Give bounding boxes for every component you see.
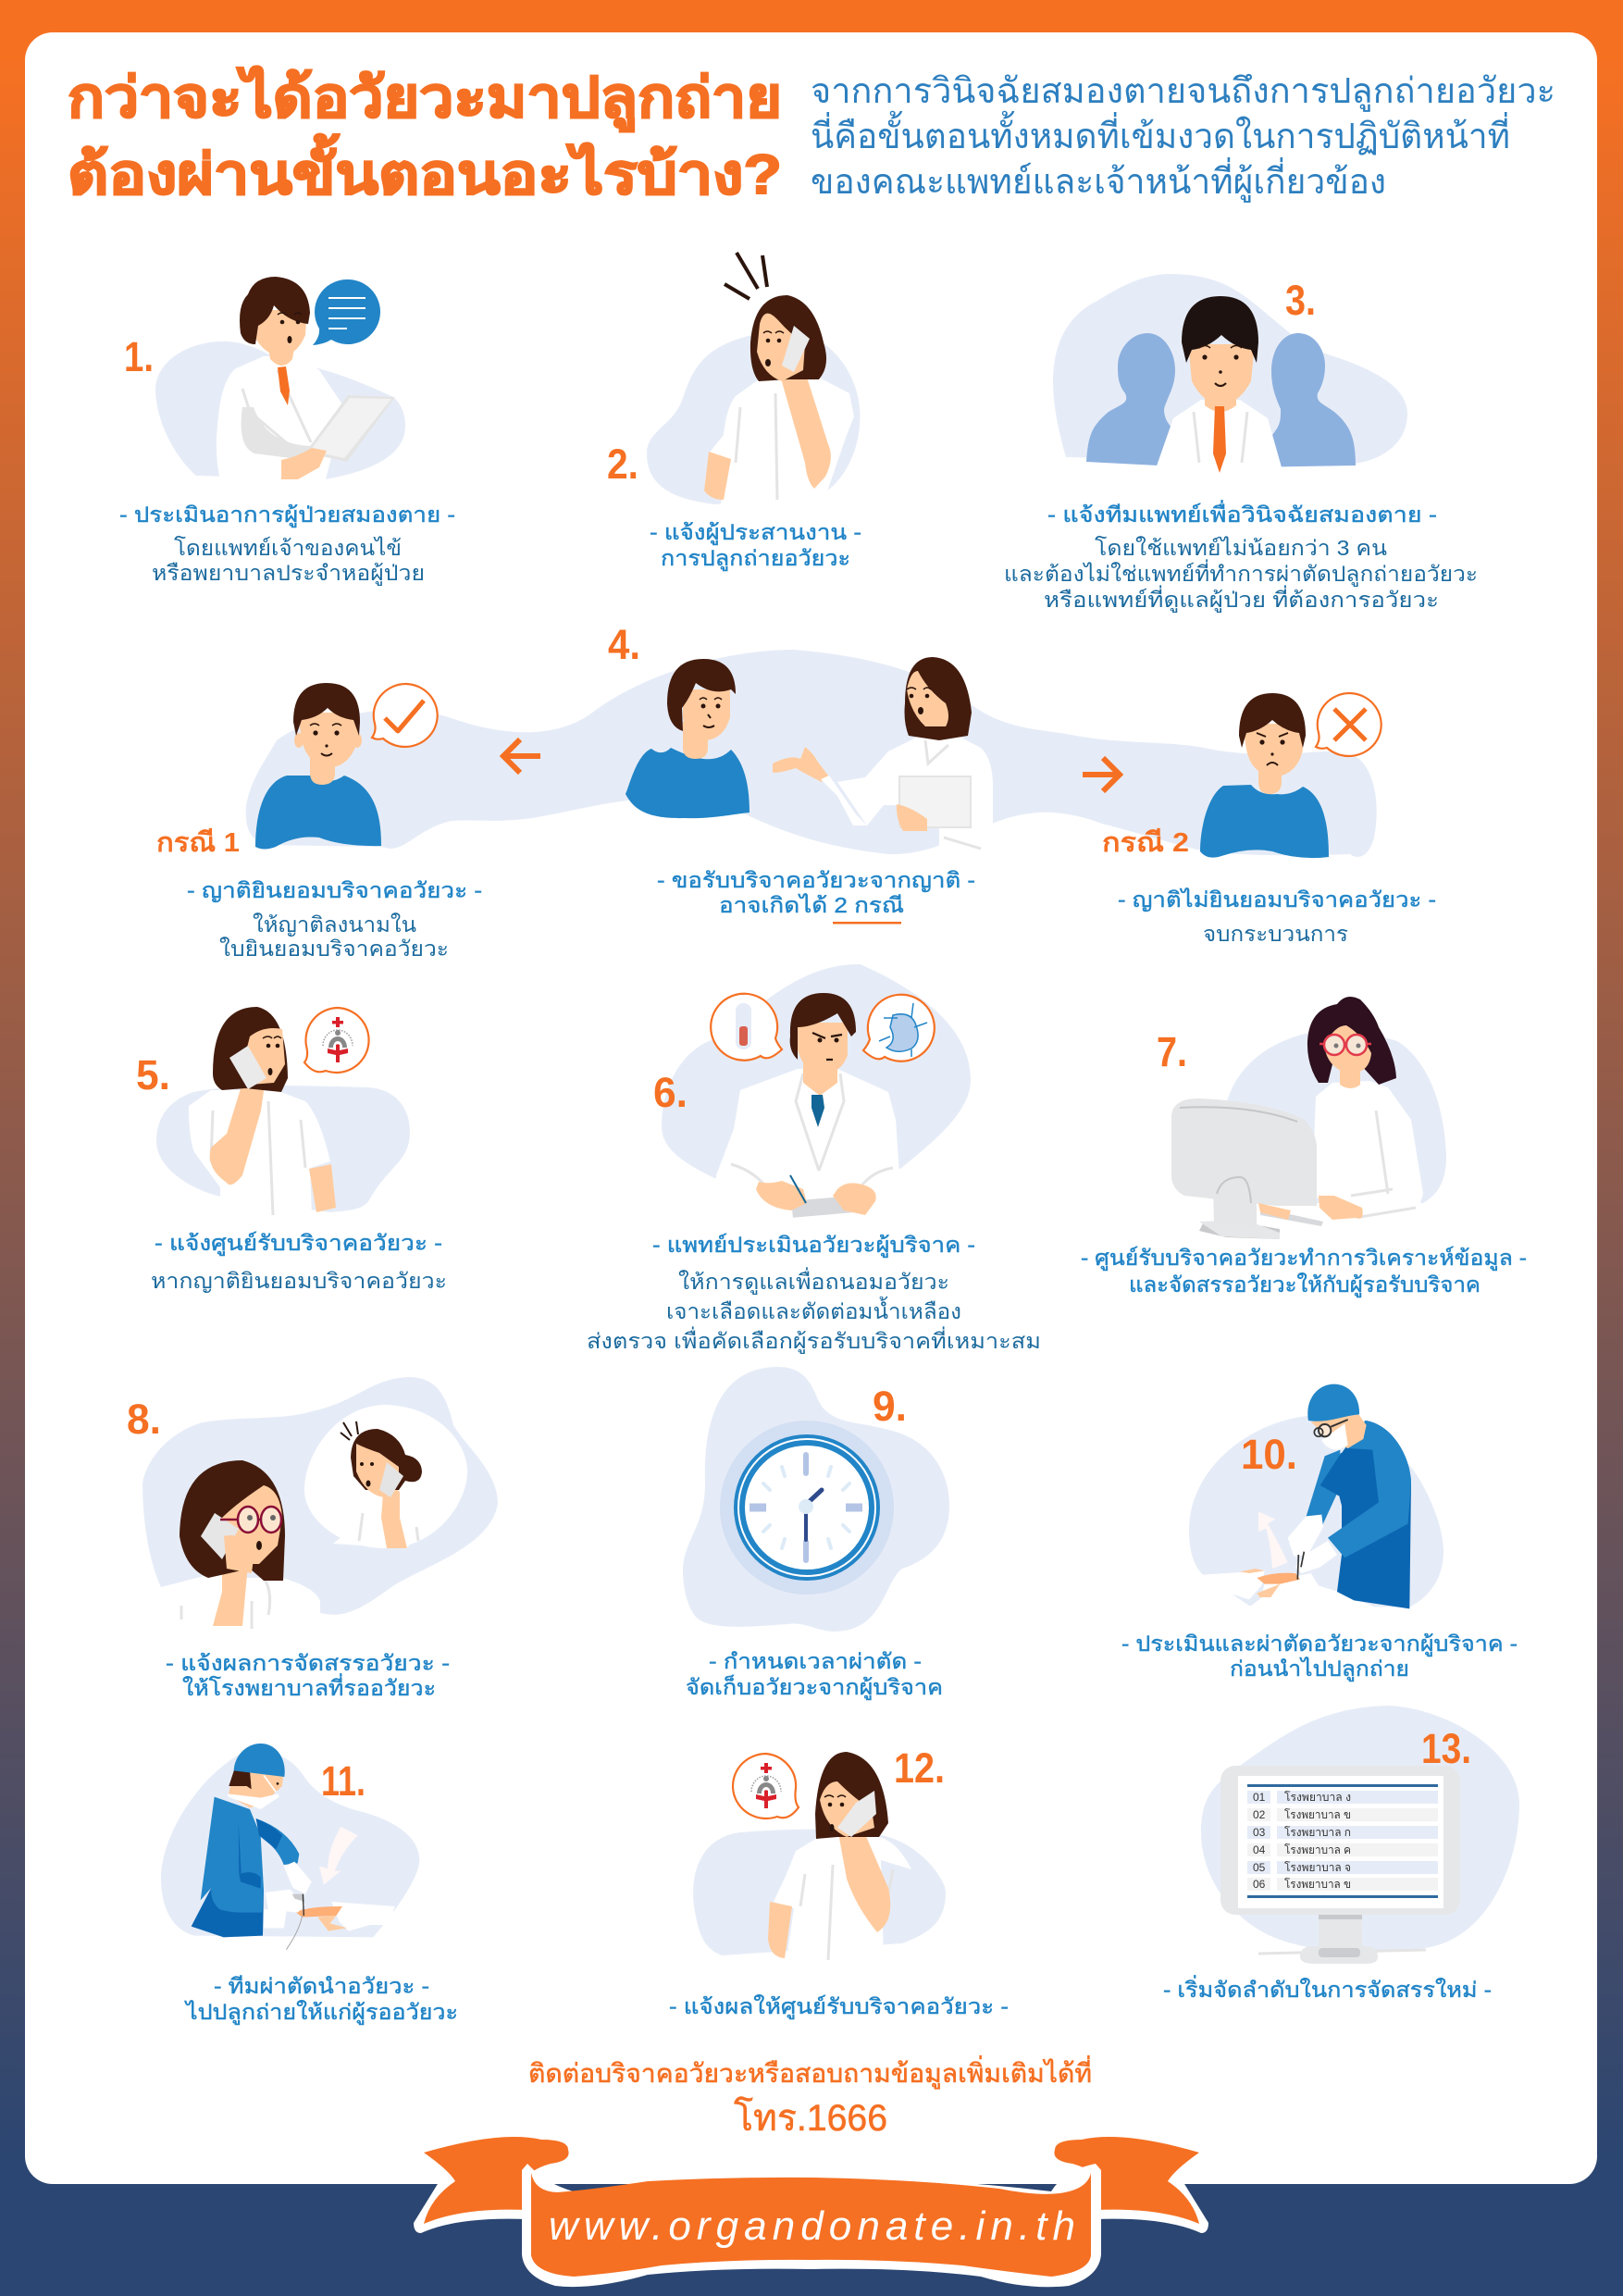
blob 2 bbox=[647, 329, 860, 504]
caption 2: การปลูกถ่ายอวัยวะ bbox=[661, 546, 850, 571]
caption 7: - ศูนย์รับบริจาคอวัยวะทำการวิเคราะห์ข้อมูล - bbox=[1081, 1246, 1527, 1271]
panel: step 12 bbox=[669, 1744, 1009, 2019]
clock bbox=[720, 1421, 894, 1595]
list row 02: 02 bbox=[1253, 1808, 1266, 1821]
caption 3: หรือแพทย์ที่ดูแลผู้ป่วย ที่ต้องการอวัยวะ bbox=[1044, 585, 1439, 613]
step number 4: 4. bbox=[608, 621, 640, 668]
ribbon banner bbox=[414, 2137, 1208, 2287]
caption 6: ให้การดูแลเพื่อถนอมอวัยวะ bbox=[678, 1267, 949, 1295]
organ bubble bbox=[863, 995, 935, 1061]
caption 1: - ประเมินอาการผู้ป่วยสมองตาย - bbox=[119, 503, 455, 527]
caption 6: ส่งตรวจ เพื่อคัดเลือกผู้รอรับบริจาคที่เหมาะสม bbox=[587, 1326, 1041, 1354]
arrow right bbox=[1083, 758, 1120, 791]
list row 02: โรงพยาบาล ข bbox=[1284, 1808, 1351, 1821]
woman on phone 12 bbox=[768, 1752, 911, 1962]
panel: step 10 bbox=[1121, 1384, 1518, 1682]
list row 03 bbox=[1247, 1826, 1438, 1839]
caption 3: - แจ้งทีมแพทย์เพื่อวินิจฉัยสมองตาย - bbox=[1047, 500, 1437, 527]
caption 9: - กำหนดเวลาผ่าตัด - bbox=[709, 1649, 922, 1673]
caption 6: เจาะเลือดและตัดต่อมน้ำเหลือง bbox=[666, 1297, 961, 1323]
white inner circle bbox=[304, 1405, 467, 1548]
list row 01: 01 bbox=[1253, 1791, 1266, 1804]
caption case 1: ใบยินยอมบริจาคอวัยวะ bbox=[219, 937, 449, 961]
step number 3: 3. bbox=[1285, 277, 1316, 324]
caption 10: - ประเมินและผ่าตัดอวัยวะจากผู้บริจาค - bbox=[1121, 1632, 1518, 1657]
panel: step 2 bbox=[607, 253, 861, 571]
computer monitor bbox=[1171, 1098, 1363, 1239]
caption case 1: ให้ญาติลงนามใน bbox=[253, 912, 416, 937]
panel: step 3 bbox=[1004, 274, 1478, 613]
blob 13 bbox=[1201, 1706, 1519, 1953]
caption 1: หรือพยาบาลประจำหอผู้ป่วย bbox=[152, 561, 425, 586]
caption 7 bbox=[1081, 1246, 1527, 1297]
woman centre bbox=[773, 657, 993, 849]
list row 02 bbox=[1247, 1808, 1438, 1821]
silhouette right bbox=[1249, 333, 1356, 467]
list row 01: โรงพยาบาล ง bbox=[1284, 1791, 1351, 1804]
list row 05: โรงพยาบาล จ bbox=[1284, 1861, 1351, 1874]
motion lines bbox=[725, 253, 767, 299]
step number 12: 12. bbox=[894, 1744, 945, 1792]
caption 7: และจัดสรรอวัยวะให้กับผู้รอรับบริจาค bbox=[1129, 1272, 1481, 1297]
list row 04: 04 bbox=[1253, 1843, 1266, 1856]
case 1 label: กรณี 1 bbox=[156, 828, 240, 858]
list row 06: 06 bbox=[1253, 1878, 1266, 1891]
caption case 2: - ญาติไม่ยินยอมบริจาคอวัยวะ - bbox=[1118, 887, 1436, 912]
case 2 label: กรณี 2 bbox=[1102, 828, 1189, 858]
caption 13: - เริ่มจัดลำดับในการจัดสรรใหม่ - bbox=[1163, 1975, 1492, 2002]
caption 11: - ทีมผ่าตัดนำอวัยวะ - bbox=[214, 1974, 429, 1998]
blob 7 bbox=[1227, 1032, 1446, 1203]
wave blob 4 bbox=[246, 650, 1377, 857]
blob 6 bbox=[662, 964, 971, 1178]
test tube bubble bbox=[711, 994, 782, 1061]
subtitle: นี่คือขั้นตอนทั้งหมดที่เข้มงวดในการปฏิบัติหน้าที่ bbox=[811, 110, 1510, 156]
blob 9 bbox=[683, 1367, 949, 1632]
step number 9: 9. bbox=[873, 1383, 907, 1430]
panel: step 11 bbox=[161, 1744, 458, 2025]
caption 6 bbox=[587, 1233, 1041, 1354]
logo bubble 12 bbox=[733, 1754, 799, 1818]
ribbon white edge bbox=[522, 2164, 1101, 2287]
woman on phone 5 bbox=[189, 1007, 336, 1217]
panel: step 6 bbox=[587, 964, 1041, 1354]
arrow left bbox=[503, 739, 540, 773]
left tail bbox=[424, 2137, 569, 2224]
panel: step 8 bbox=[127, 1377, 498, 1700]
left tail outline bbox=[414, 2179, 527, 2233]
list row 06 bbox=[1247, 1878, 1438, 1891]
caption centre: อาจเกิดได้ 2 กรณี bbox=[719, 893, 904, 917]
silhouette left bbox=[1086, 333, 1194, 467]
caption 10 bbox=[1121, 1632, 1518, 1682]
list row 04 bbox=[1247, 1843, 1438, 1856]
caption 3 bbox=[1004, 500, 1478, 613]
panel: step 5 bbox=[136, 1007, 447, 1293]
step number 13: 13. bbox=[1421, 1725, 1471, 1772]
caption 5: หากญาติยินยอมบริจาคอวัยวะ bbox=[151, 1269, 447, 1293]
subtitle: จากการวินิจฉัยสมองตายจนถึงการปลูกถ่ายอวัยวะ bbox=[811, 72, 1555, 112]
contact text: โทร.1666 bbox=[734, 2097, 887, 2139]
caption 6: - แพทย์ประเมินอวัยวะผู้บริจาค - bbox=[652, 1233, 975, 1258]
title bbox=[68, 65, 782, 205]
blob 12 bbox=[693, 1830, 946, 1955]
caption 2: - แจ้งผู้ประสานงาน - bbox=[650, 520, 861, 545]
panel: step 13 bbox=[1163, 1706, 1519, 2002]
list row 04: โรงพยาบาล ค bbox=[1284, 1843, 1351, 1856]
panel: step 1 bbox=[119, 277, 455, 586]
step number 11: 11. bbox=[321, 1757, 365, 1805]
list row 05 bbox=[1247, 1861, 1438, 1874]
blob 5 bbox=[156, 1086, 410, 1212]
illustration 10 bbox=[1189, 1384, 1443, 1608]
caption centre bbox=[657, 868, 975, 924]
large woman with glasses bbox=[161, 1460, 320, 1629]
caption 8: - แจ้งผลการจัดสรรอวัยวะ - bbox=[166, 1651, 450, 1675]
caption 12: - แจ้งผลให้ศูนย์รับบริจาคอวัยวะ - bbox=[669, 1994, 1009, 2019]
caption case 1: - ญาติยินยอมบริจาคอวัยวะ - bbox=[187, 878, 482, 902]
caption 5: - แจ้งศูนย์รับบริจาคอวัยวะ - bbox=[155, 1231, 442, 1256]
caption 8 bbox=[166, 1651, 450, 1700]
small woman on phone bbox=[333, 1429, 422, 1548]
caption 11 bbox=[184, 1974, 458, 2025]
list row 01 bbox=[1247, 1791, 1438, 1804]
right tail bbox=[1054, 2137, 1199, 2224]
caption centre: - ขอรับบริจาคอวัยวะจากญาติ - bbox=[657, 868, 975, 892]
title: กว่าจะได้อวัยวะมาปลูกถ่าย bbox=[68, 65, 782, 132]
step number 8: 8. bbox=[127, 1396, 161, 1443]
person case 2 bbox=[1200, 693, 1329, 858]
subtitle: ของคณะแพทย์และเจ้าหน้าที่ผู้เกี่ยวข้อง bbox=[811, 157, 1386, 203]
caption 9 bbox=[686, 1649, 943, 1700]
caption case 2: จบกระบวนการ bbox=[1203, 922, 1348, 946]
panel: step 7 bbox=[1081, 997, 1527, 1297]
doctor with tablet bbox=[217, 277, 395, 479]
blob 8 bbox=[142, 1377, 498, 1615]
title: ต้องผ่านขั้นตอนอะไรบ้าง? bbox=[68, 133, 782, 205]
ribbon body bbox=[531, 2173, 1091, 2277]
blob 3 bbox=[1053, 274, 1407, 464]
step number 2: 2. bbox=[607, 441, 638, 488]
speech bubble blue bbox=[313, 279, 380, 345]
list row 06: โรงพยาบาล ข bbox=[1284, 1878, 1351, 1891]
woman at computer bbox=[1307, 997, 1423, 1222]
list row 05: 05 bbox=[1253, 1861, 1266, 1874]
contact text bbox=[528, 2055, 1092, 2139]
caption case 2 bbox=[1118, 887, 1436, 946]
step number 5: 5. bbox=[136, 1051, 170, 1098]
check bubble bbox=[372, 684, 438, 747]
caption 1: โดยแพทย์เจ้าของคนไข้ bbox=[174, 536, 402, 560]
logo bubble bbox=[304, 1008, 369, 1073]
monitor with hospital list bbox=[1220, 1766, 1460, 1964]
caption 1 bbox=[119, 503, 455, 586]
doctor with notes bbox=[716, 993, 899, 1218]
step number 1: 1. bbox=[124, 333, 154, 380]
list row 03: 03 bbox=[1253, 1826, 1266, 1839]
caption 10: ก่อนนำไปปลูกถ่าย bbox=[1230, 1657, 1409, 1682]
list row 03: โรงพยาบาล ก bbox=[1284, 1826, 1351, 1839]
panel: step 4 bbox=[156, 621, 1436, 961]
person centre bbox=[626, 659, 750, 818]
right tail outline bbox=[1095, 2179, 1208, 2233]
illustration 11 bbox=[161, 1744, 419, 1950]
bottom navy band bbox=[0, 2182, 1623, 2296]
blob 1 bbox=[155, 341, 405, 479]
motion lines small bbox=[341, 1421, 358, 1440]
woman on phone bbox=[704, 295, 854, 507]
step number 7: 7. bbox=[1157, 1028, 1187, 1075]
step number 10: 10. bbox=[1241, 1431, 1297, 1478]
panel: step 9 bbox=[683, 1367, 949, 1700]
caption 3: และต้องไม่ใช่แพทย์ที่ทำการผ่าตัดปลูกถ่ายอวัยวะ bbox=[1004, 559, 1478, 587]
person case 1 bbox=[255, 683, 381, 850]
step number 6: 6. bbox=[653, 1069, 688, 1116]
caption case 1 bbox=[187, 878, 482, 961]
caption 11: ไปปลูกถ่ายให้แก่ผู้รออวัยวะ bbox=[184, 2000, 458, 2025]
caption 3: โดยใช้แพทย์ไม่น้อยกว่า 3 คน bbox=[1095, 536, 1387, 560]
caption 9: จัดเก็บอวัยวะจากผู้บริจาค bbox=[686, 1673, 943, 1700]
caption 5 bbox=[151, 1231, 447, 1293]
caption 2 bbox=[650, 520, 861, 571]
website url: www.organdonate.in.th bbox=[549, 2203, 1075, 2249]
man in centre bbox=[1154, 296, 1283, 474]
subtitle bbox=[811, 72, 1555, 203]
cross bubble bbox=[1316, 693, 1381, 756]
caption 8: ให้โรงพยาบาลที่รออวัยวะ bbox=[182, 1673, 436, 1700]
contact text: ติดต่อบริจาคอวัยวะหรือสอบถามข้อมูลเพิ่มเติมได้ที่ bbox=[528, 2055, 1092, 2090]
